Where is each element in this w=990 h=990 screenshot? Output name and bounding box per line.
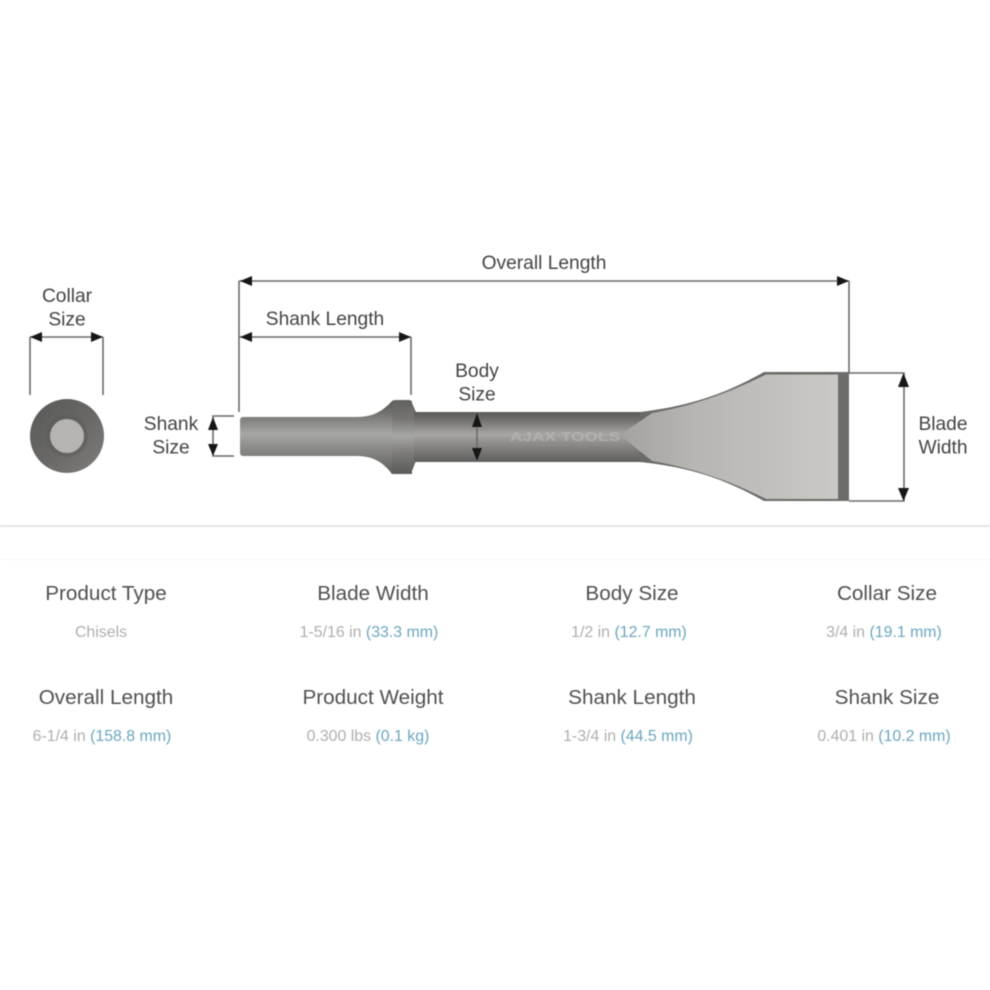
spec: blade width: 1-5/16 in (33.3 mm): [300, 624, 438, 641]
spec: product type: Product Type: [45, 582, 167, 605]
spec: shank length: [563, 686, 696, 745]
spec: product weight: 0.300 lbs (0.1 kg): [307, 728, 429, 745]
spec: product weight: Product Weight: [302, 686, 444, 709]
chisel collar: [392, 400, 416, 474]
collar end view icon: [30, 399, 104, 473]
spec: body size: [571, 582, 687, 641]
spec: collar size: [826, 582, 942, 641]
spec: shank size: [817, 686, 951, 745]
dimension: collar size: [30, 286, 103, 395]
spec: shank length: Shank Length: [568, 686, 696, 709]
spec: overall length: Overall Length: [39, 686, 173, 709]
spec: overall length: 6-1/4 in (158.8 mm): [33, 728, 171, 745]
spec: body size: Body Size: [585, 582, 679, 605]
blade cutting edge: [838, 373, 849, 501]
brand marking: AJAX TOOLS: [510, 429, 620, 444]
chisel shank: [240, 401, 412, 474]
label: blade width: Blade: [918, 414, 968, 435]
spec: shank size: 0.401 in (10.2 mm): [817, 728, 951, 745]
blade face: [620, 374, 838, 499]
label: shank size: Shank: [144, 414, 198, 435]
label: body size: Body: [455, 361, 499, 382]
chisel blade: [640, 372, 849, 501]
spec: collar size: Collar Size: [837, 582, 937, 605]
spec: blade width: Blade Width: [317, 582, 429, 605]
dimension: shank size: [144, 414, 234, 458]
spec: overall length: [33, 686, 173, 745]
dimension: overall length: [239, 253, 849, 412]
spec: collar size: 3/4 in (19.1 mm): [826, 624, 942, 641]
dimension: shank length: [239, 309, 411, 395]
spec: blade width: [300, 582, 438, 641]
spec: product type: [45, 582, 167, 641]
label: blade width: Width: [918, 438, 968, 458]
spec: shank length: 1-3/4 in (44.5 mm): [563, 728, 693, 745]
dimension: blade width: [849, 373, 968, 501]
chisel body: [414, 412, 645, 462]
label: body size: Size: [458, 384, 496, 406]
label: shank size: Size: [152, 438, 190, 458]
label: shank length: Shank Length: [266, 309, 384, 330]
chisel illustration: [240, 372, 849, 501]
label: overall length: Overall Length: [482, 253, 606, 274]
spec: shank size: Shank Size: [835, 686, 939, 709]
dimension: body size: [455, 361, 499, 461]
spec: body size: 1/2 in (12.7 mm): [571, 624, 687, 641]
label: collar size: Collar: [42, 286, 92, 307]
label: collar size: Size: [48, 310, 86, 330]
spec: product type: Chisels: [75, 624, 127, 641]
spec: product weight: [302, 686, 444, 745]
